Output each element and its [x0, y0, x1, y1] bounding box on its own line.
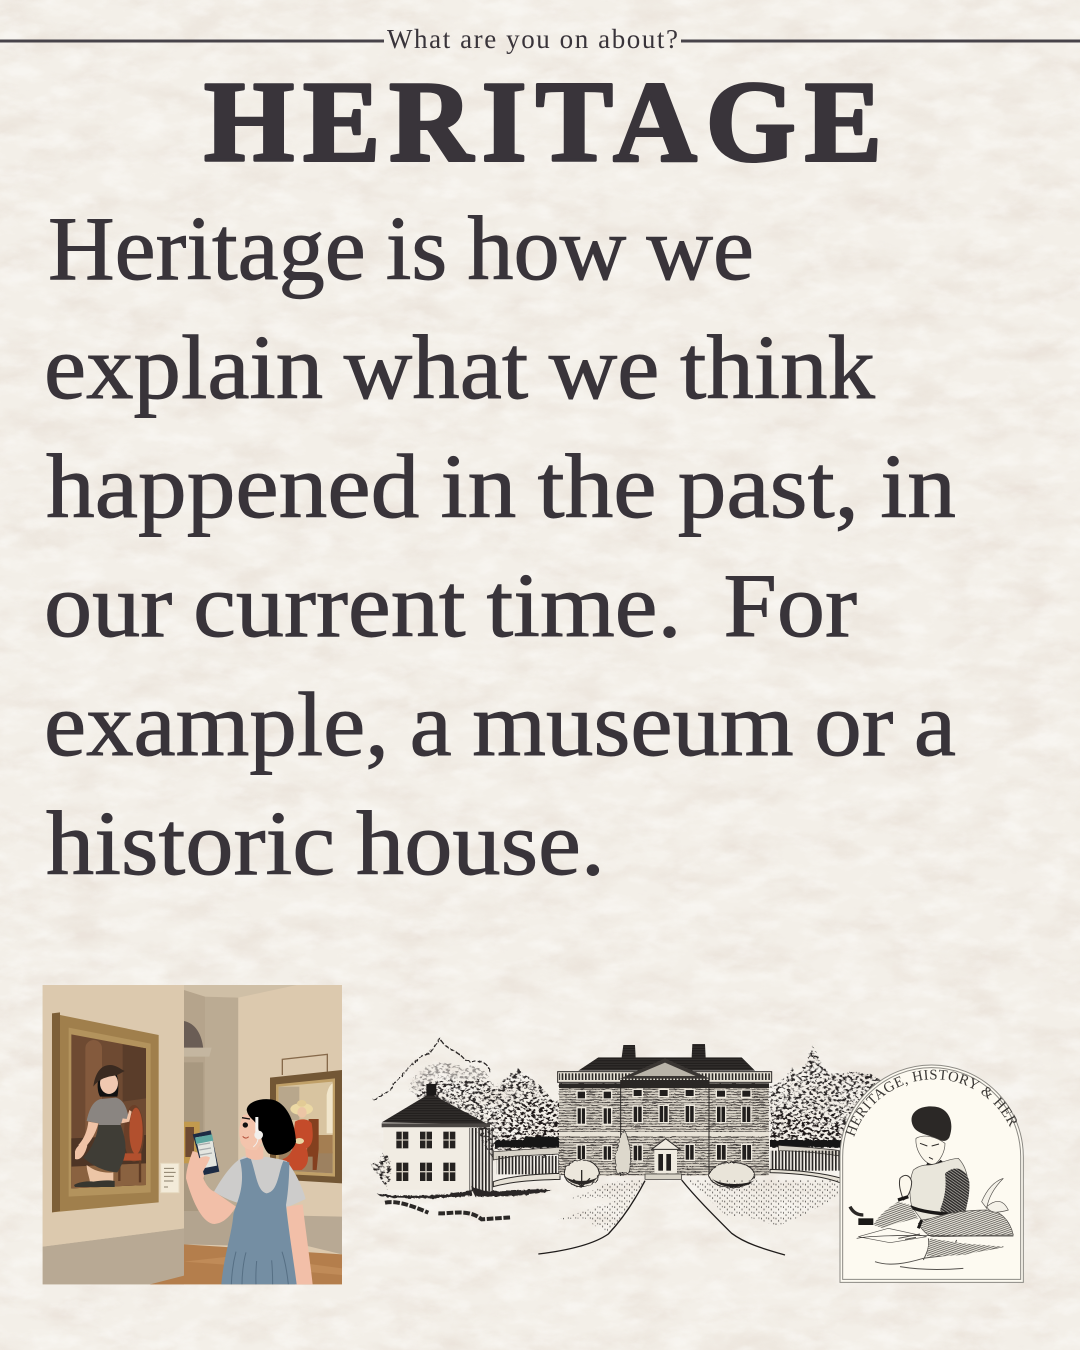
trees: [373, 1038, 880, 1157]
visitor: [186, 1099, 313, 1284]
logo badge: Heritage, History & Her: [840, 1064, 1024, 1283]
body text: example, a museum or a: [44, 674, 956, 775]
large painting: [52, 1012, 159, 1212]
body text: historic house.: [46, 793, 605, 894]
body text: [44, 198, 956, 894]
eyebrow with rules: [0, 24, 1080, 54]
illustration: museum visitor: [43, 985, 342, 1284]
body text: Heritage is how we: [48, 198, 754, 299]
colonnades: [493, 1145, 842, 1187]
right painting: [270, 1054, 342, 1183]
portico: [645, 1139, 682, 1179]
body text: happened in the past, in: [46, 436, 956, 537]
mansion windows: [577, 1089, 752, 1161]
body text: our current time. For: [44, 555, 857, 656]
lawn and drive: [385, 1180, 838, 1255]
wall label: [161, 1163, 179, 1193]
shrubs: [564, 1130, 757, 1188]
mansion: [558, 1044, 772, 1179]
small house: [372, 1084, 552, 1198]
title: HERITAGE: [204, 58, 882, 186]
eyebrow with rules: What are you on about?: [387, 24, 678, 54]
badge lettering: HERITAGE, HISTORY & HER: [845, 1070, 1017, 1137]
body text: explain what we think: [44, 317, 876, 418]
woman writing engraving: [850, 1106, 1013, 1269]
illustration: historic house engraving: [372, 1038, 880, 1255]
